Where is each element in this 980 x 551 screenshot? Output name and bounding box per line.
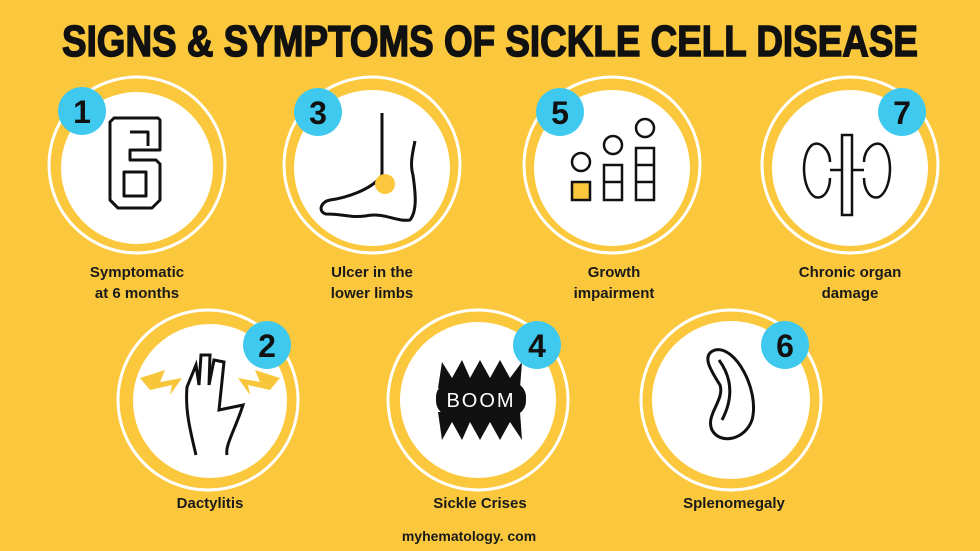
badge 7: 7 bbox=[893, 95, 911, 131]
badge 4: 4 bbox=[528, 328, 546, 364]
icon: boom: BOOM bbox=[446, 390, 516, 412]
label 7: damage bbox=[822, 285, 878, 302]
badge 4 bbox=[513, 321, 561, 369]
label 5 bbox=[574, 264, 654, 302]
label 2: Dactylitis bbox=[177, 495, 243, 512]
panel 3: ulcer bbox=[284, 77, 460, 253]
badge 3 bbox=[294, 88, 342, 136]
badge 5: 5 bbox=[551, 95, 569, 131]
badge 6: 6 bbox=[776, 328, 794, 364]
icon: boom bbox=[436, 360, 526, 440]
label 5: impairment bbox=[574, 285, 654, 302]
footer: myhematology. com bbox=[402, 528, 536, 544]
icon: spleen bbox=[708, 350, 754, 439]
label 4: Sickle Crises bbox=[433, 495, 527, 512]
badge 3: 3 bbox=[309, 95, 327, 131]
badge 1: 1 bbox=[73, 94, 91, 130]
panel 5: growth bbox=[524, 77, 700, 253]
icon: foot bbox=[321, 113, 415, 220]
panel 4: sickle crises bbox=[388, 310, 568, 490]
label 6: Splenomegaly bbox=[683, 495, 785, 512]
panel 1: symptomatic at 6 months bbox=[49, 77, 225, 253]
badge 2 bbox=[243, 321, 291, 369]
label 1 bbox=[90, 264, 184, 302]
label 3: lower limbs bbox=[331, 285, 413, 302]
label 3 bbox=[331, 264, 413, 302]
icon: growth chart bbox=[572, 119, 654, 200]
panel 7: organ damage bbox=[762, 77, 938, 253]
label 7: Chronic organ bbox=[799, 264, 901, 281]
label 3: Ulcer in the bbox=[331, 264, 413, 281]
icon: kidneys bbox=[804, 135, 890, 215]
label 1: Symptomatic bbox=[90, 264, 184, 281]
icon: number six bbox=[110, 118, 160, 208]
label 7 bbox=[799, 264, 901, 302]
label 5: Growth bbox=[588, 264, 640, 281]
badge 1 bbox=[58, 87, 106, 135]
badge 6 bbox=[761, 321, 809, 369]
label 1: at 6 months bbox=[95, 285, 179, 302]
badge 7 bbox=[878, 88, 926, 136]
panel 2: dactylitis bbox=[118, 310, 298, 490]
icon: hand with lightning bbox=[140, 370, 182, 395]
badge 5 bbox=[536, 88, 584, 136]
badge 2: 2 bbox=[258, 328, 276, 364]
panel 6: splenomegaly bbox=[641, 310, 821, 490]
